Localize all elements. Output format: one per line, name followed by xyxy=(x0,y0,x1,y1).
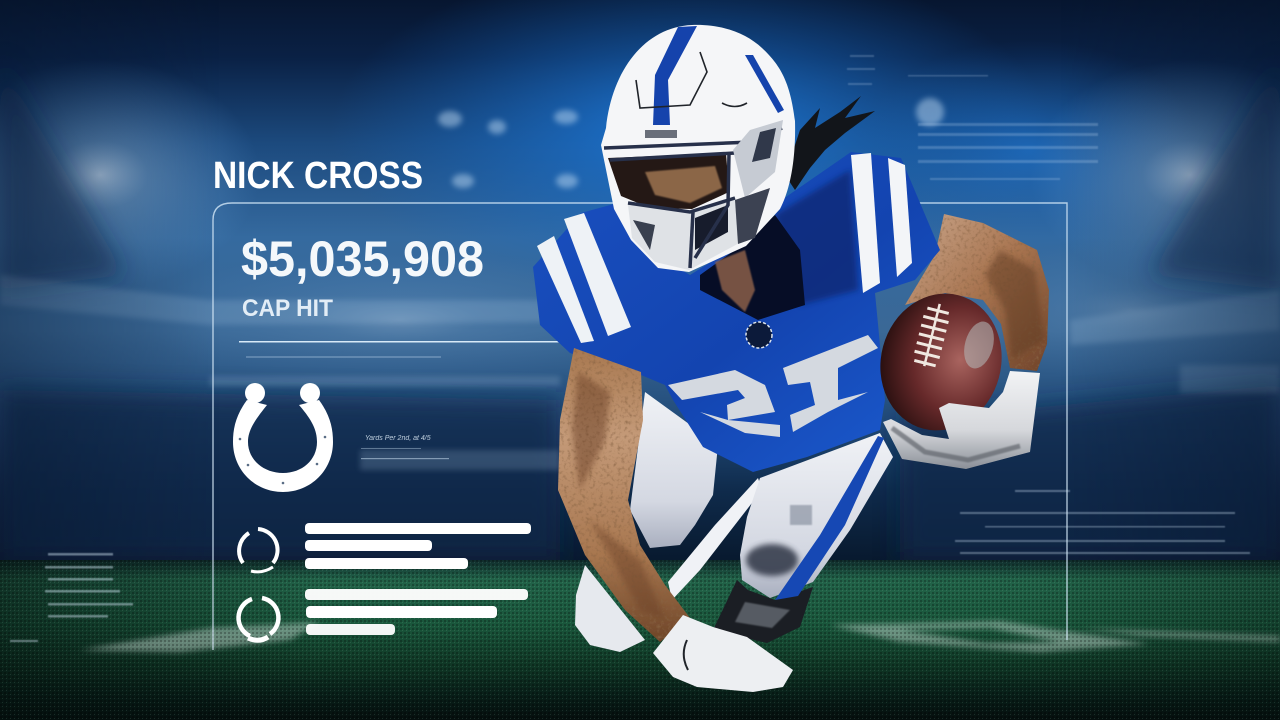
small stat note xyxy=(361,435,449,459)
helmet xyxy=(601,25,795,272)
face opening xyxy=(608,153,729,209)
front leg xyxy=(740,433,893,598)
arm glove on ball xyxy=(883,371,1040,469)
jersey xyxy=(533,152,940,472)
back thigh xyxy=(630,392,718,548)
cap hit label: CAP HIT xyxy=(242,295,333,322)
glove on turf xyxy=(653,615,793,692)
ring icon 1 xyxy=(239,529,278,572)
football field xyxy=(0,560,1280,720)
title: NICK CROSS xyxy=(213,155,423,197)
ring icon 2 xyxy=(239,598,278,640)
cleat xyxy=(713,580,813,643)
lower facemask xyxy=(628,200,745,270)
icon: horseshoe xyxy=(233,383,333,492)
jersey number xyxy=(668,335,878,437)
data-text blocks in background xyxy=(10,55,1250,642)
stands left and right xyxy=(0,60,1280,560)
player xyxy=(533,25,1049,692)
football xyxy=(865,280,1017,444)
panel: glass card outline xyxy=(213,203,1067,650)
jersey collar badge xyxy=(746,322,772,348)
shin strip xyxy=(668,478,762,600)
facemask bars xyxy=(604,128,782,268)
bars 2 xyxy=(305,589,528,635)
right arm xyxy=(905,214,1049,371)
leg stripe xyxy=(775,436,884,600)
left arm xyxy=(558,348,690,642)
helmet stripe xyxy=(653,26,697,125)
back knee on ground xyxy=(575,565,645,652)
small stat note: Yards Per 2nd, at 4/5 xyxy=(365,435,431,442)
bars 1 xyxy=(305,523,531,569)
shoulder stripes xyxy=(564,213,631,336)
stat row 1 xyxy=(239,523,531,572)
stat row 2 xyxy=(239,589,528,640)
dreadlocks xyxy=(785,96,875,190)
cap hit amount: $5,035,908 xyxy=(241,231,484,287)
divider with caption xyxy=(239,341,559,358)
